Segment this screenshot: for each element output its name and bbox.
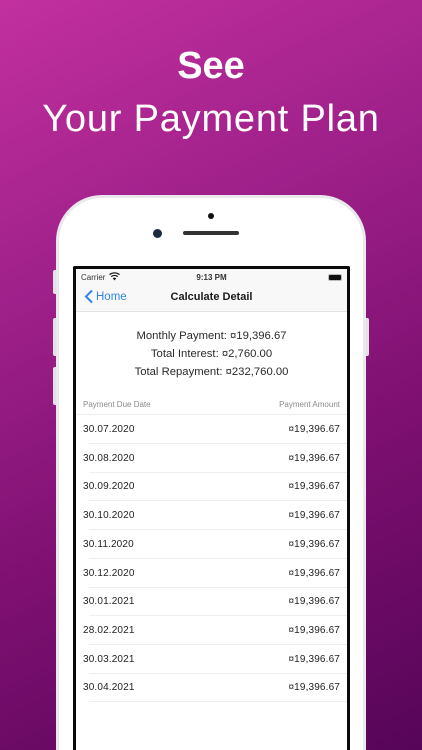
payment table: 28.02.2021 — [83, 625, 135, 636]
payment table: ¤19,396.67 — [288, 625, 340, 636]
front camera — [153, 229, 162, 238]
payment table: 30.04.2021 — [83, 682, 135, 693]
payment table: 30.11.2020 — [83, 539, 134, 550]
payment table: ¤19,396.67 — [288, 481, 340, 492]
summary text: Total Interest: ¤2,760.00 — [151, 348, 272, 360]
table header: Payment Due Date — [83, 400, 151, 409]
payment table: 30.12.2020 — [83, 568, 135, 579]
payment table: ¤19,396.67 — [288, 424, 340, 435]
speaker — [183, 231, 239, 235]
table header — [76, 397, 347, 415]
carrier label: Carrier — [81, 273, 105, 282]
payment table: ¤19,396.67 — [288, 682, 340, 693]
payment table — [83, 424, 347, 702]
payment table: 30.08.2020 — [83, 453, 135, 464]
phone body — [56, 195, 366, 750]
summary text: Total Repayment: ¤232,760.00 — [135, 366, 288, 378]
payment table: 30.07.2020 — [83, 424, 135, 435]
back label: Home — [96, 291, 127, 303]
payment table: ¤19,396.67 — [288, 596, 340, 607]
title: See: See — [177, 45, 245, 87]
payment table: 30.01.2021 — [83, 596, 135, 607]
icon: battery — [328, 274, 342, 281]
summary text: Monthly Payment: ¤19,396.67 — [136, 330, 287, 342]
payment table: ¤19,396.67 — [288, 568, 340, 579]
table header: Payment Amount — [279, 400, 340, 409]
back chevron — [84, 290, 93, 304]
payment table: ¤19,396.67 — [288, 453, 340, 464]
payment table: ¤19,396.67 — [288, 539, 340, 550]
screen title: Calculate Detail — [171, 291, 252, 303]
payment table: 30.03.2021 — [83, 654, 135, 665]
navigation bar — [76, 269, 347, 312]
phone mockup — [53, 195, 369, 750]
subtitle: Your Payment Plan: Your Payment Plan — [42, 98, 380, 140]
clock: 9:13 PM — [196, 273, 227, 282]
side buttons — [53, 270, 57, 294]
icon: wifi — [109, 272, 120, 280]
sensor dot — [208, 213, 214, 219]
payment table: ¤19,396.67 — [288, 510, 340, 521]
payment table: 30.10.2020 — [83, 510, 135, 521]
payment table: ¤19,396.67 — [288, 654, 340, 665]
payment table: 30.09.2020 — [83, 481, 135, 492]
summary text — [134, 330, 288, 378]
phone screen — [73, 266, 350, 750]
